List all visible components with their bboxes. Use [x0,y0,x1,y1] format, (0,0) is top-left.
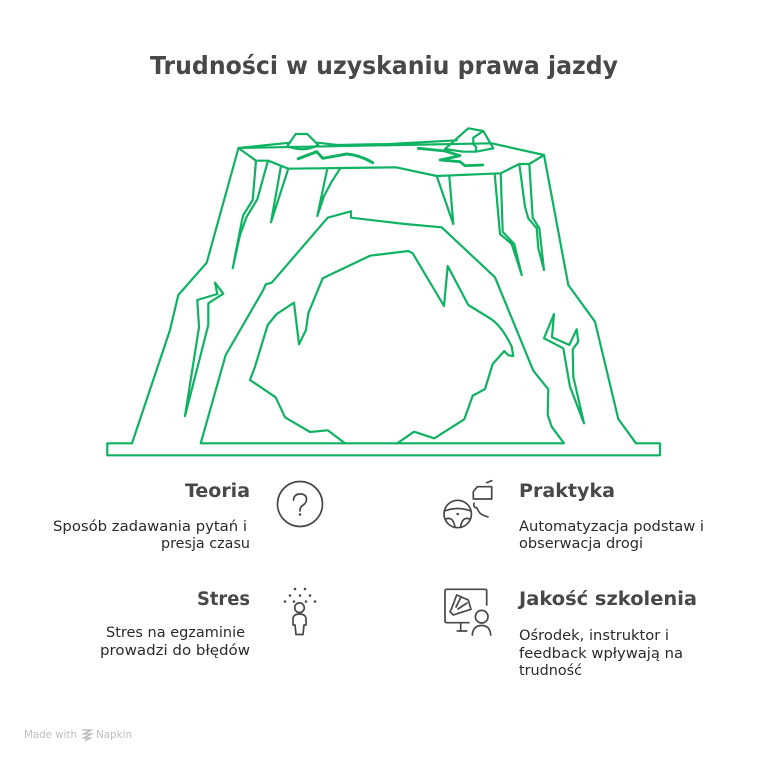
plateau front edge [238,148,544,176]
cave illustration [107,128,660,455]
block: Teoria [53,481,250,552]
footer: made with Napkin: Napkin [96,728,132,741]
footer: made with Napkin [24,728,132,741]
block: Jakość szkolenia [517,589,697,679]
description: presja czasu [161,536,250,552]
rock top right [445,128,493,152]
heading: Teoria [185,481,250,502]
footer: made with Napkin: Made with [24,728,77,741]
surface cracks [298,152,373,163]
title: Trudności w uzyskaniu prawa jazdy [150,51,618,80]
icon: instructor with monitor [445,589,491,635]
block: Praktyka [519,481,704,552]
right icicles [437,164,544,275]
heading: Stres [197,589,250,610]
description [519,628,683,679]
description: prowadzi do błędów [100,643,250,659]
description: Sposób zadawania pytań i [53,519,247,535]
description [519,519,704,552]
description: feedback wpływają na [519,646,683,662]
description: obserwacja drogi [519,536,643,552]
left wall crack [185,283,223,416]
description [53,519,250,552]
description: Ośrodek, instruktor i [519,628,669,644]
block: Stres [100,589,250,659]
cave opening [250,251,513,443]
outer rock silhouette and ground [107,140,660,455]
icon: person under pressure [284,588,316,634]
description [100,625,250,659]
heading: Jakość szkolenia [517,589,697,610]
icon: steering wheel and mirror [444,481,492,528]
icon: question mark [278,482,322,526]
description: Stres na egzaminie [106,625,245,641]
heading: Praktyka [519,481,615,502]
description: Automatyzacja podstaw i [519,519,704,535]
rock top left [287,134,318,149]
left icicles [233,161,340,268]
description: trudność [519,663,582,679]
right wall crack [544,314,584,423]
middle arch [201,211,564,443]
